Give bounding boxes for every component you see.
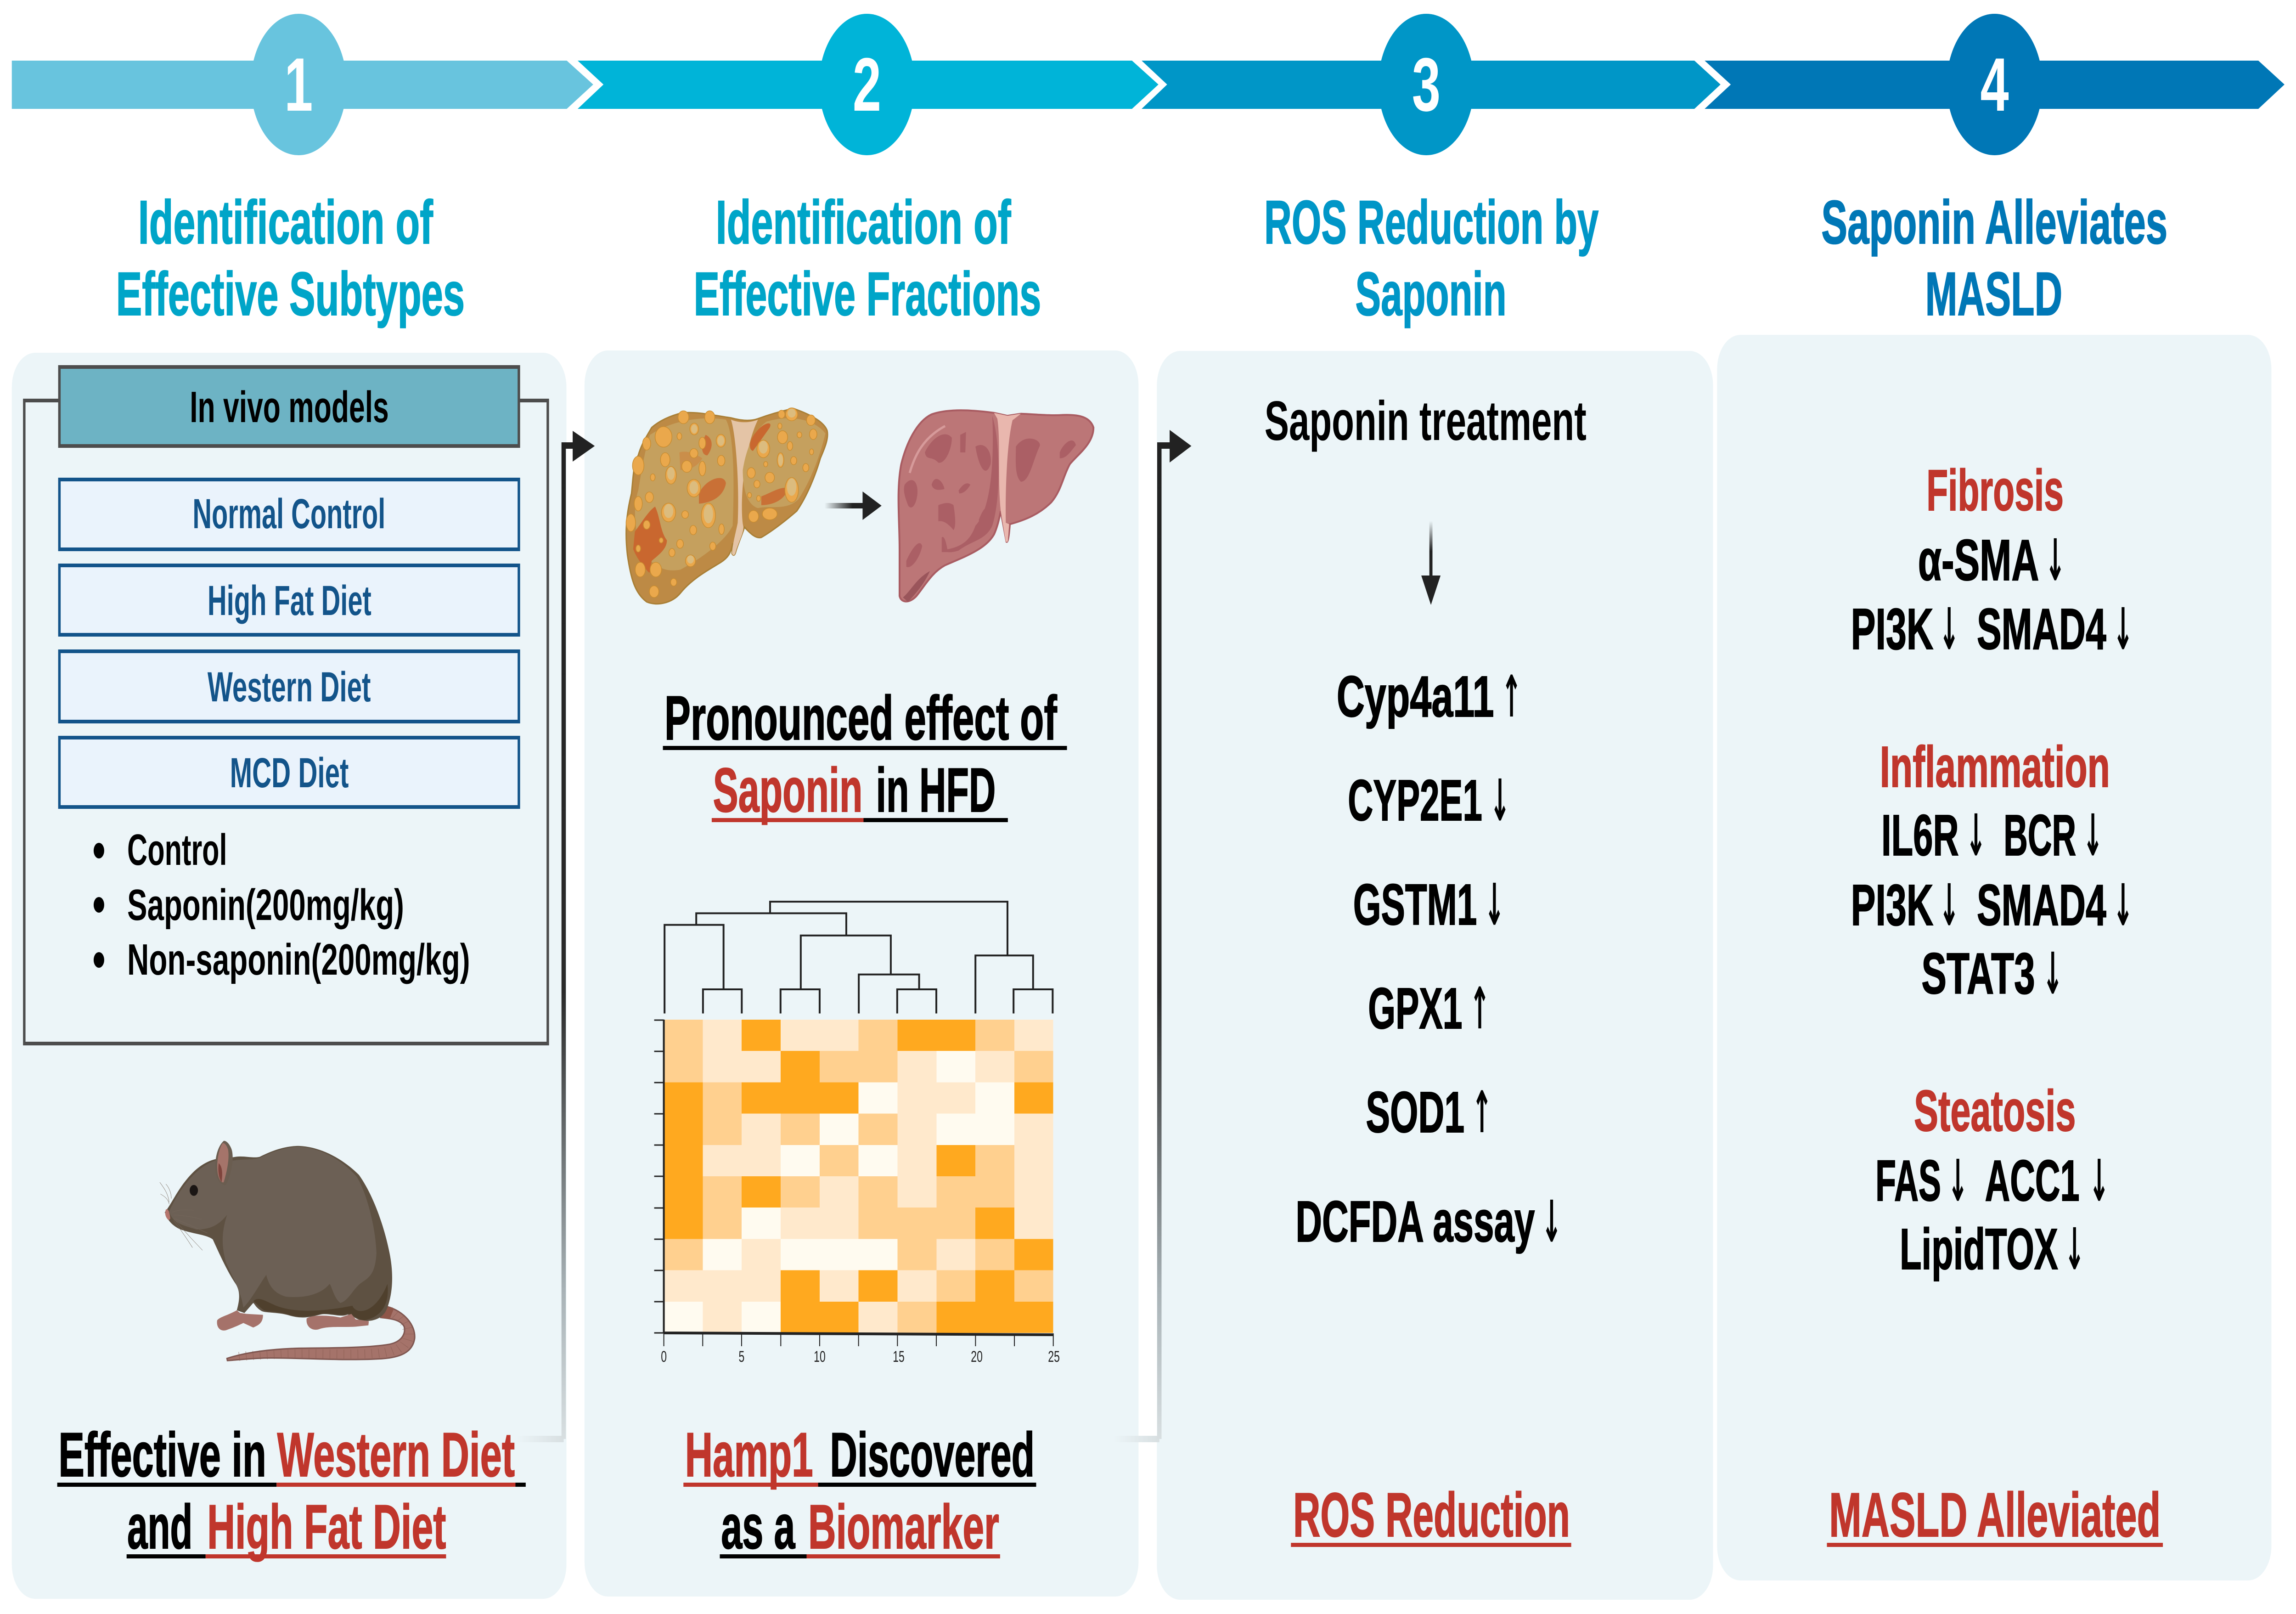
conclusion: effective in western diet and high fat diet: Western Diet: [277, 1420, 515, 1490]
group: inflammation: ↓: [2113, 872, 2133, 939]
in vivo models header: In vivo models: [190, 383, 389, 432]
in vivo models header: [59, 367, 519, 446]
group: steatosis: [1875, 1078, 2110, 1283]
heading: step 1: Identification of: [138, 188, 433, 257]
group: fibrosis: [1851, 458, 2133, 663]
group: steatosis: ↓: [2064, 1216, 2085, 1283]
panel: identification of effective subtypes: [12, 353, 567, 1599]
group: inflammation: IL6R: [1881, 803, 1959, 868]
chart: heatmap axes: [654, 1020, 1053, 1346]
panel: saponin alleviates MASLD: [1717, 335, 2271, 1580]
conclusion: MASLD alleviated: MASLD Alleviated: [1829, 1480, 2161, 1550]
step 2 arrow and number: 2: [853, 42, 881, 127]
step 4 arrow and number: 4: [1981, 42, 2009, 127]
gene changes list: GPX1: [1368, 976, 1463, 1041]
heading: step 3: [1264, 188, 1598, 328]
text: saponin treatment: Saponin treatment: [1265, 390, 1587, 452]
chart: x axis labels: 15: [893, 1349, 905, 1366]
conclusion: hamp1 discovered as a biomarker: Biomarker: [808, 1492, 999, 1562]
conclusion: effective in western diet and high fat diet: [57, 1420, 526, 1562]
group: steatosis: Steatosis: [1914, 1078, 2076, 1143]
group: inflammation: ↓: [1939, 872, 1959, 939]
chart: x axis labels: 10: [814, 1349, 826, 1366]
chart: x axis labels: [661, 1349, 1060, 1366]
heading: step 2: [694, 188, 1041, 328]
group: fibrosis: α-SMA: [1918, 528, 2039, 593]
icon: rat: [160, 1141, 415, 1360]
gene changes list: DCFDA assay: [1295, 1189, 1535, 1254]
heading: step 1: [116, 188, 465, 328]
heading: step 2: Identification of: [716, 188, 1011, 257]
panel: ROS reduction by saponin: [1157, 351, 1713, 1600]
step 1 arrow and number: [12, 14, 593, 155]
gene changes list: SOD1: [1366, 1080, 1464, 1145]
group: inflammation: [1851, 734, 2133, 1007]
group: fibrosis: ↓: [2045, 527, 2065, 594]
heading: step 1: Effective Subtypes: [116, 260, 465, 328]
group: inflammation: STAT3: [1921, 941, 2035, 1006]
chart: x axis labels: 25: [1048, 1349, 1060, 1366]
diet box: western diet: Western Diet: [208, 663, 371, 711]
gene changes list: ↑: [1501, 664, 1522, 730]
text: pronounced effect of saponin in HFD: Saponin: [713, 755, 862, 825]
conclusion: effective in western diet and high fat diet: Effective in: [58, 1420, 266, 1490]
gene changes list: CYP2E1: [1348, 768, 1482, 833]
gene changes list: ↑: [1469, 976, 1490, 1042]
panel: identification of effective fractions: [585, 350, 1138, 1597]
group: fibrosis: Fibrosis: [1926, 458, 2064, 523]
chart: x axis labels: 5: [739, 1349, 744, 1366]
group: inflammation: ↓: [1966, 802, 1986, 869]
conclusion: hamp1 discovered as a biomarker: as a: [721, 1492, 795, 1562]
chart: heatmap: [664, 1020, 1053, 1333]
step 1 arrow and number: 1: [284, 42, 313, 127]
group: inflammation: BCR: [2003, 803, 2076, 868]
diet box: MCD diet: [59, 738, 519, 807]
heading: step 4: [1821, 188, 2167, 328]
diet box: normal control: [59, 480, 519, 549]
group: fibrosis: ↓: [2113, 596, 2133, 663]
step 3 arrow and number: 3: [1412, 42, 1441, 127]
conclusion: effective in western diet and high fat diet: High Fat Diet: [207, 1492, 446, 1562]
group: inflammation: Inflammation: [1880, 734, 2110, 799]
step 2 arrow and number: [578, 14, 1159, 155]
chart: dendrogram: [664, 902, 1052, 1014]
group: fibrosis: ↓: [1939, 596, 1959, 663]
text: pronounced effect of saponin in HFD: in HFD: [876, 755, 996, 825]
text: pronounced effect of saponin in HFD: [663, 683, 1067, 825]
gene changes list: [1295, 664, 1562, 1255]
heading: step 4: Saponin Alleviates: [1821, 188, 2167, 257]
diet box: western diet: [59, 651, 519, 722]
gene changes list: ↓: [1490, 767, 1510, 834]
chart: x axis labels: 0: [661, 1349, 667, 1366]
heading: step 3: ROS Reduction by: [1264, 188, 1598, 257]
chart: x axis labels: 20: [971, 1349, 983, 1366]
group: steatosis: FAS: [1875, 1148, 1941, 1213]
conclusion: hamp1 discovered as a biomarker: Discovered: [830, 1420, 1035, 1490]
diet box: normal control: Normal Control: [192, 490, 385, 537]
icon: fatty liver: [626, 408, 827, 604]
group: fibrosis: PI3K: [1851, 597, 1933, 661]
in vivo models frame: [24, 401, 548, 1044]
arrow: fatty liver to healthier liver: [825, 491, 882, 520]
group: fibrosis: SMAD4: [1977, 597, 2106, 661]
treatment list: Non-saponin(200mg/kg): [127, 936, 470, 984]
group: steatosis: ACC1: [1985, 1148, 2080, 1213]
heading: step 3: Saponin: [1355, 260, 1507, 328]
step banner: [12, 14, 2285, 155]
step 4 arrow and number: [1705, 14, 2285, 155]
text: pronounced effect of saponin in HFD: Pronounced effect of: [664, 683, 1057, 753]
step 3 arrow and number: [1142, 14, 1721, 155]
group: inflammation: ↓: [2082, 802, 2103, 869]
gene changes list: Cyp4a11: [1337, 664, 1494, 729]
icon: healthier liver: [899, 410, 1093, 602]
group: steatosis: ↓: [2089, 1148, 2110, 1214]
treatment list: [94, 826, 470, 984]
group: inflammation: PI3K: [1851, 873, 1933, 937]
heading: step 2: Effective Fractions: [694, 260, 1041, 328]
diet box: high fat diet: High Fat Diet: [208, 577, 371, 624]
gene changes list: ↑: [1472, 1079, 1492, 1146]
connector arrow: panel 2 to panel 3: [1114, 430, 1191, 1442]
group: steatosis: LipidTOX: [1900, 1217, 2058, 1281]
conclusion: hamp1 discovered as a biomarker: Hamp1: [685, 1420, 813, 1490]
connector arrow: panel 1 to panel 2: [517, 431, 595, 1442]
group: inflammation: ↓: [2043, 941, 2063, 1007]
heading: step 4: MASLD: [1925, 260, 2062, 328]
gene changes list: ↓: [1484, 872, 1505, 938]
conclusion: effective in western diet and high fat diet: and: [127, 1492, 192, 1562]
diet box: high fat diet: [59, 565, 519, 635]
group: steatosis: ↓: [1947, 1148, 1968, 1214]
diet box: MCD diet: MCD Diet: [230, 749, 349, 796]
treatment list: Control: [127, 826, 227, 875]
arrow: treatment leads to gene changes: [1421, 521, 1441, 605]
conclusion: hamp1 discovered as a biomarker: [683, 1420, 1036, 1562]
gene changes list: GSTM1: [1353, 872, 1477, 937]
conclusion: ROS reduction: ROS Reduction: [1293, 1480, 1570, 1550]
treatment list: Saponin(200mg/kg): [127, 881, 404, 930]
gene changes list: ↓: [1542, 1189, 1562, 1255]
group: inflammation: SMAD4: [1977, 873, 2106, 937]
